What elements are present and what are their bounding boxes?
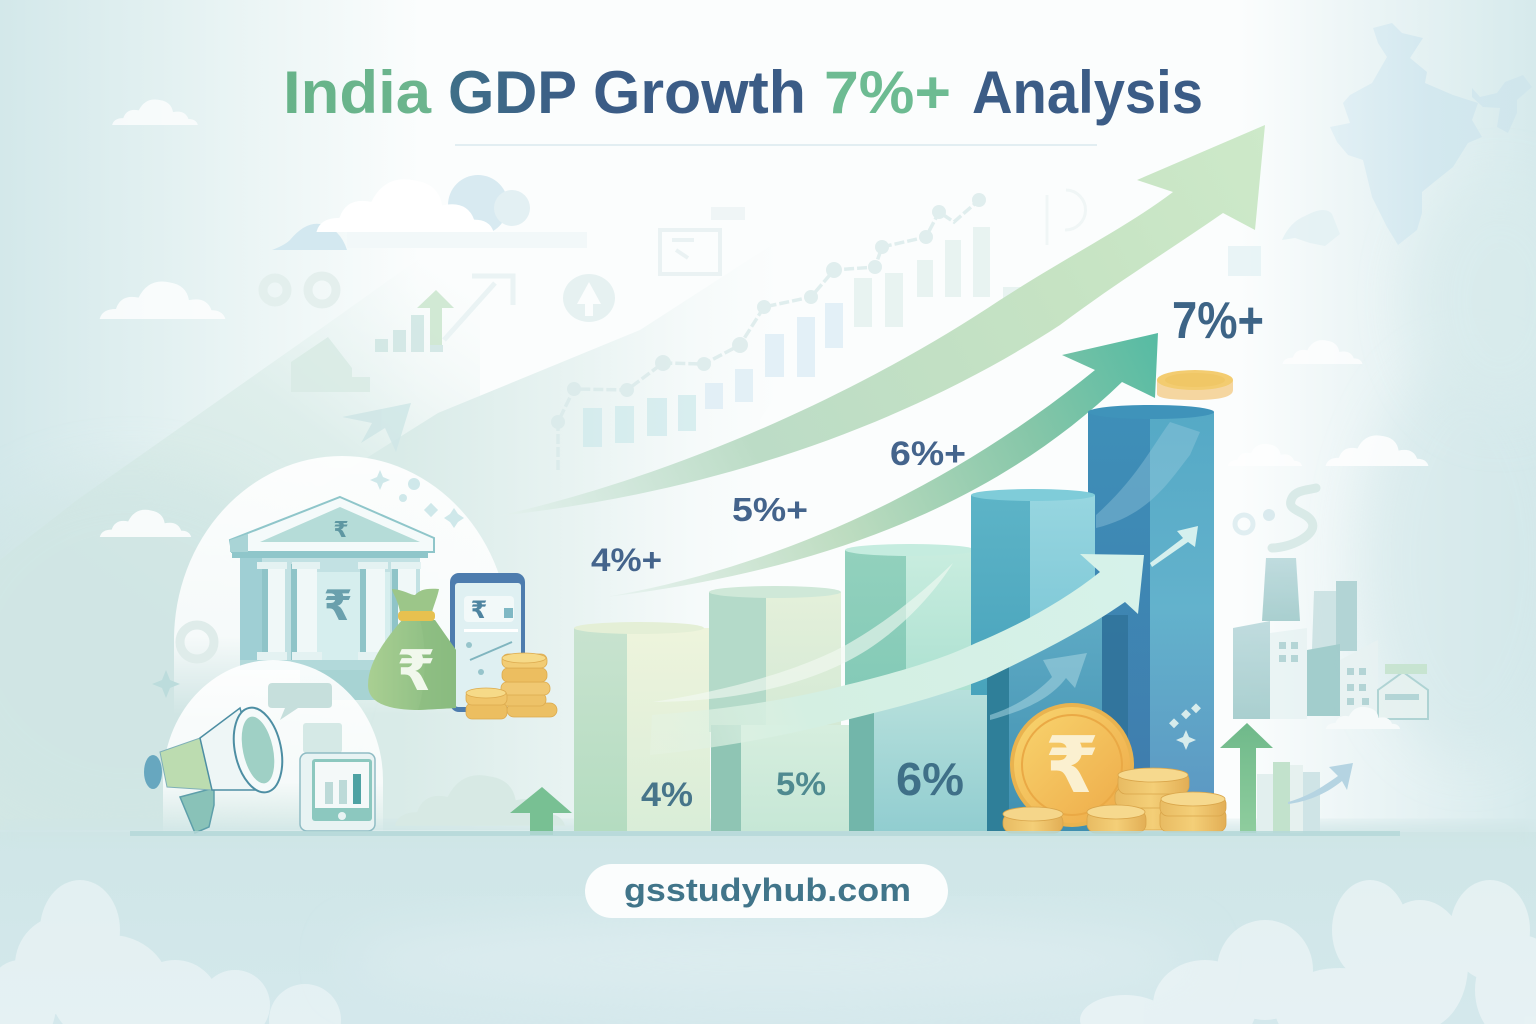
icon: phone: ₹ <box>471 597 487 624</box>
ground line <box>130 831 1400 836</box>
icon: right up arrow and bars <box>1220 723 1353 833</box>
middle arrow <box>606 333 1158 597</box>
bar 4 <box>971 489 1102 831</box>
arrow on bar 5 <box>1096 422 1200 528</box>
icon: top coin <box>1157 370 1233 400</box>
url pill <box>585 864 948 918</box>
mint arrow <box>650 554 1144 755</box>
icon: paper plane <box>342 403 411 452</box>
value labels on bars: 5% <box>776 766 826 802</box>
india map <box>1330 23 1532 245</box>
icon: tablet <box>300 753 375 831</box>
bottom right clouds <box>1080 880 1536 1024</box>
icon: gears <box>263 276 336 304</box>
growth labels: 4%+ <box>591 542 662 578</box>
icon: bank: ₹ <box>333 517 349 542</box>
bar 5 <box>1088 405 1214 820</box>
bubble behind bank <box>174 456 510 715</box>
streak on bars <box>653 563 953 702</box>
icon: factory and city <box>1233 488 1428 719</box>
bar chart <box>574 405 1214 831</box>
growth labels: 6%+ <box>890 435 966 473</box>
arrow on bar 4 <box>990 653 1087 720</box>
icon: houses <box>291 337 370 392</box>
icon: phone <box>450 573 525 712</box>
value labels on bars: 6% <box>896 753 964 805</box>
icon: megaphone <box>144 703 289 833</box>
clouds upper <box>100 99 1428 537</box>
icon: coin stacks right <box>1003 768 1226 833</box>
icon: large rupee coin <box>1010 703 1134 827</box>
faint icons <box>263 190 1340 452</box>
growth labels <box>591 292 1264 578</box>
title: GDP <box>448 59 577 126</box>
title: Analysis <box>972 59 1203 126</box>
cloud near bars <box>395 775 565 826</box>
icon: bank <box>230 497 440 700</box>
icon: mini bars and up arrow <box>375 276 513 352</box>
icon: money bag <box>368 589 456 710</box>
icon: speech bubble <box>268 683 332 720</box>
title <box>283 59 1203 126</box>
title: 7%+ <box>824 59 951 126</box>
icon: left up arrow <box>510 787 572 835</box>
sparkles <box>1169 703 1201 750</box>
big arrow <box>498 125 1265 516</box>
smoke and gear <box>1235 488 1316 548</box>
bar 3 <box>845 544 987 831</box>
bar 2 <box>709 586 849 831</box>
small arrow <box>1150 526 1198 567</box>
bottom left clouds <box>0 880 341 1024</box>
value labels on bars: 4% <box>641 776 693 814</box>
icon: panel <box>660 230 720 274</box>
bubble behind megaphone <box>163 660 383 835</box>
title: India <box>283 59 432 126</box>
icon: money bag: ₹ <box>397 639 435 702</box>
icon: bank: ₹ <box>323 582 353 629</box>
icon: large rupee coin: ₹ <box>1045 721 1099 809</box>
url pill: gsstudyhub.com <box>624 872 911 908</box>
bar 1 <box>574 622 710 831</box>
icon: coin stacks left <box>466 653 557 719</box>
title: Growth <box>593 59 806 126</box>
growth labels: 7%+ <box>1172 292 1264 350</box>
value labels on bars <box>641 753 964 814</box>
growth labels: 5%+ <box>732 491 808 528</box>
decorative sparkles near bank <box>152 470 464 698</box>
icon: arrow in circle <box>563 274 615 322</box>
background bar and line chart <box>551 193 1029 470</box>
